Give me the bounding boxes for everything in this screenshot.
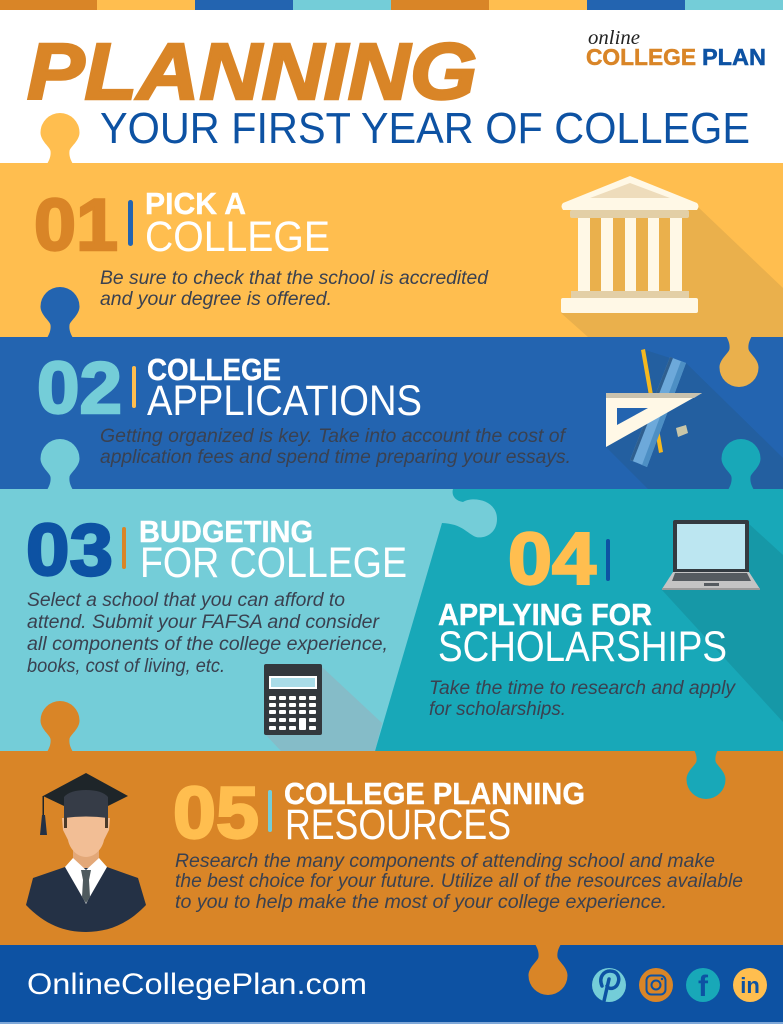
icon: instagram	[639, 968, 673, 1002]
heading: budgeting for college: BUDGETING	[139, 514, 313, 549]
body text 03	[27, 589, 388, 677]
heading: applying for scholarships: APPLYING FOR	[438, 597, 652, 632]
icon: linkedin: in	[740, 973, 760, 998]
body text 05: the best choice for your future. Utilize all of the resources available	[175, 870, 743, 892]
title: PLANNING	[27, 27, 477, 116]
title: YOUR FIRST YEAR OF COLLEGE	[100, 104, 750, 153]
body text 04	[429, 677, 736, 720]
top colour strip	[0, 0, 783, 10]
icon: graduate	[26, 773, 146, 932]
heading: college planning resources: COLLEGE PLANNING	[284, 776, 585, 811]
heading: budgeting for college	[139, 514, 407, 587]
icon: drafting tools	[606, 349, 783, 489]
logo: PLAN	[702, 44, 766, 70]
body text 03: books, cost of living, etc.	[27, 655, 225, 677]
body text 05: Research the many components of attending school and make	[175, 850, 715, 872]
heading number 04: 04	[508, 519, 596, 600]
heading: pick a college	[145, 186, 330, 261]
heading: pick a college: PICK A	[145, 186, 246, 221]
body text 04: Take the time to research and apply	[429, 677, 736, 699]
icon: laptop	[662, 520, 783, 722]
panel: 04 applying for scholarships	[300, 439, 783, 751]
icon: linkedin	[733, 968, 767, 1002]
body text 04: for scholarships.	[429, 698, 566, 720]
body text 05	[175, 850, 743, 913]
logo: online	[588, 27, 640, 49]
heading: college applications	[147, 352, 422, 425]
heading number 02: 02	[37, 348, 122, 429]
body text 01: and your degree is offered.	[100, 288, 332, 310]
body text 02	[100, 425, 571, 468]
heading: applying for scholarships: SCHOLARSHIPS	[438, 623, 727, 671]
panel: 03 budgeting for college	[0, 439, 497, 751]
logo	[586, 27, 766, 70]
panel: 05 college planning resources	[0, 701, 783, 945]
icon: pinterest	[592, 968, 626, 1002]
heading: pick a college: COLLEGE	[145, 213, 330, 261]
body text 01: Be sure to check that the school is accredited	[100, 267, 489, 289]
heading: college applications: COLLEGE	[147, 352, 281, 387]
heading: budgeting for college: FOR COLLEGE	[140, 539, 407, 587]
body text 03: Select a school that you can afford to	[27, 589, 345, 611]
icon: facebook: f	[698, 970, 709, 1003]
body text 02: application fees and spend time preparing your essays.	[100, 446, 571, 468]
panel: 01 pick a college	[0, 113, 783, 337]
body text 02: Getting organized is key. Take into account the cost of	[100, 425, 568, 447]
heading: college planning resources	[284, 776, 585, 849]
heading number 05: 05	[173, 773, 259, 854]
website url: OnlineCollegePlan.com	[27, 968, 367, 1001]
heading: college planning resources: RESOURCES	[285, 801, 511, 849]
icon: calculator	[264, 664, 382, 751]
panel: 02 college applications	[0, 287, 783, 489]
body text 03: all components of the college experience,	[27, 633, 388, 655]
heading number 03: 03	[26, 510, 113, 591]
body text 05: to you to help make the most of your college experience.	[175, 891, 667, 913]
panel: footer	[0, 944, 783, 1024]
body text 03: attend. Submit your FAFSA and consider	[27, 611, 380, 633]
body text 01	[100, 267, 489, 310]
heading number 01: 01	[34, 185, 118, 266]
title	[27, 27, 750, 153]
icon: temple	[561, 176, 783, 337]
heading: applying for scholarships	[438, 597, 727, 671]
heading: college applications: APPLICATIONS	[147, 377, 422, 425]
logo: COLLEGE	[586, 44, 696, 70]
icon: facebook	[686, 968, 720, 1003]
